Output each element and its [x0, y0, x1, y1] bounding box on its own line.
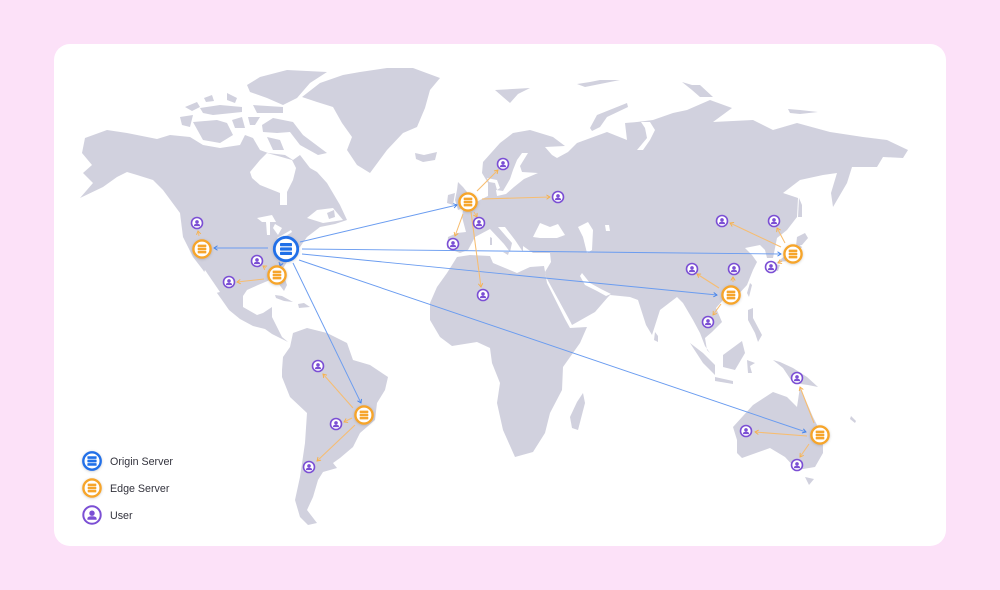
Africa [430, 255, 587, 457]
edge server markers [193, 193, 829, 444]
Australia [733, 387, 823, 470]
Asia-Pacific islands [654, 198, 818, 387]
card panel [54, 44, 946, 546]
Tasmania and New Zealand [805, 416, 856, 485]
Newfoundland [327, 210, 335, 219]
South America [282, 328, 388, 525]
Greenland [302, 68, 440, 173]
origin server marker [274, 237, 298, 261]
Madagascar [570, 393, 585, 430]
legend item: edge server: Edge Server [110, 483, 170, 495]
origin to edge connections [214, 205, 806, 432]
edge to user connections [198, 170, 814, 461]
legend item: origin server: Origin Server [110, 456, 173, 468]
legend item: user: User [110, 510, 133, 522]
user markers [192, 158, 802, 472]
Iceland [415, 152, 437, 162]
Cuba and Caribbean [275, 295, 293, 302]
Eurasia [447, 100, 908, 353]
legend [83, 452, 173, 524]
European islands [447, 80, 818, 255]
Canadian Arctic islands [180, 70, 327, 155]
inland seas [203, 122, 655, 296]
North America [80, 130, 347, 342]
world map [80, 68, 908, 525]
